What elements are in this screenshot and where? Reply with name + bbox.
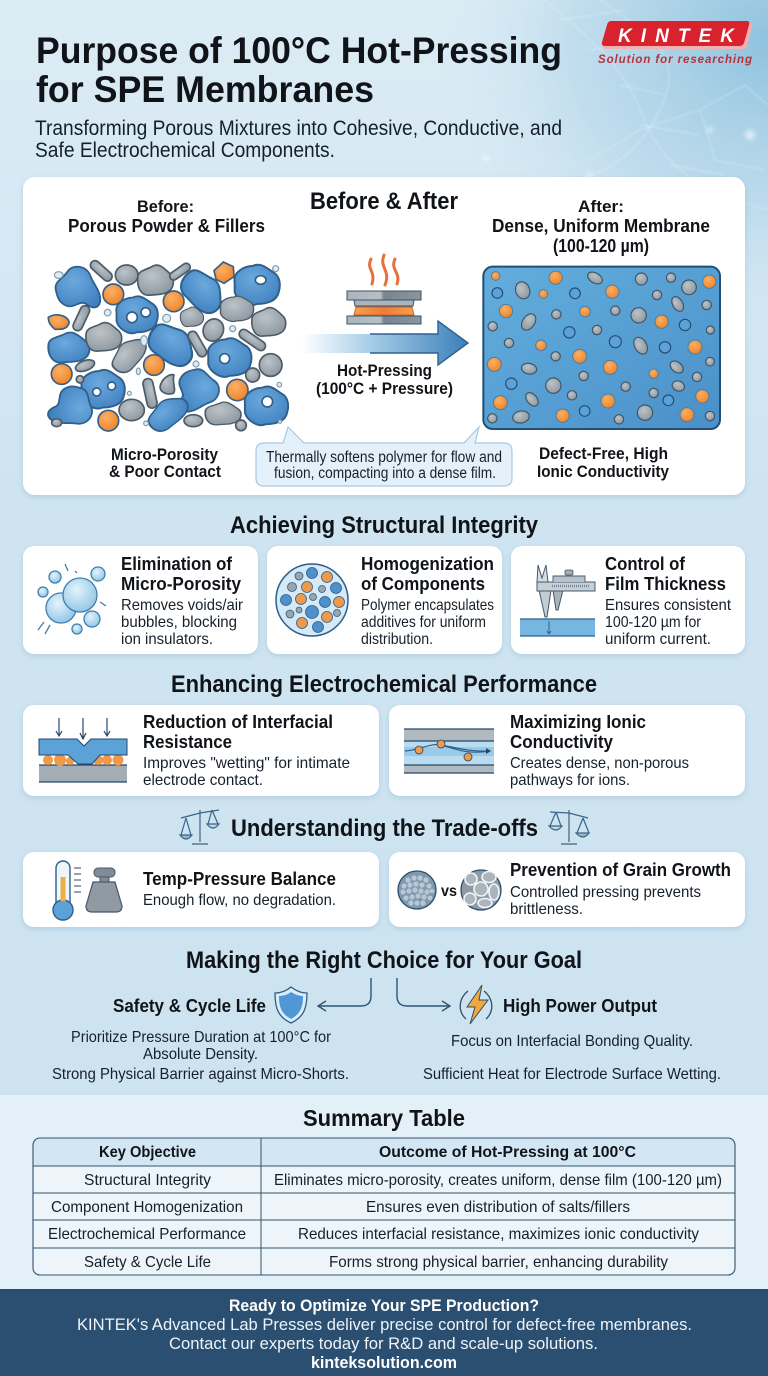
logo: KINTEK: [598, 21, 752, 66]
title: [36, 30, 562, 110]
after label: [492, 197, 710, 256]
table header: Key Objective: [99, 1144, 196, 1161]
row: safety and cycle life: Safety & Cycle Life: [84, 1254, 211, 1271]
text: maximizing ionic conductivity: Creates dense, non-porous: [510, 755, 689, 772]
arrow: hot-pressing direction: [302, 321, 468, 365]
icon: ion pathway: [404, 729, 494, 773]
label: defect-free: Ionic Conductivity: [537, 463, 670, 481]
label: safety and cycle life: Safety & Cycle Life: [113, 996, 266, 1016]
icon: balance scale right: [549, 810, 589, 844]
arrow label: (100°C + Pressure): [316, 380, 453, 398]
logo: KINTEK: KINTEK: [618, 26, 735, 47]
text: power guidance: Focus on Interfacial Bonding Quality.: [451, 1033, 693, 1050]
text: safety guidance: [52, 1029, 349, 1083]
footer call to action: kinteksolution.com: [311, 1354, 457, 1372]
text: control of film thickness: Ensures consistent: [605, 597, 732, 614]
text: prevention of grain growth: Prevention of Grain Growth: [510, 859, 731, 880]
heading: structural integrity: Achieving Structural Integrity: [230, 512, 539, 539]
after label: (100-120 µm): [553, 236, 649, 256]
arrow outline: [370, 321, 468, 365]
after label: Dense, Uniform Membrane: [492, 216, 710, 236]
arrow: to safety: [318, 978, 371, 1011]
text: homogenization of components: of Components: [361, 573, 485, 594]
label: defect-free: Defect-Free, High: [539, 445, 668, 463]
text: elimination of micro-porosity: [121, 553, 244, 648]
row: electrochemical performance: Reduces interfacial resistance, maximizes ionic conductivity: [298, 1226, 699, 1243]
text: temp-pressure balance: [143, 868, 336, 909]
text: elimination of micro-porosity: ion insulators.: [121, 631, 213, 648]
text: maximizing ionic conductivity: [510, 711, 689, 789]
row: component homogenization: [51, 1199, 630, 1216]
text: safety guidance: Absolute Density.: [143, 1046, 258, 1063]
text: maximizing ionic conductivity: pathways for ions.: [510, 772, 630, 789]
before label: Porous Powder & Fillers: [68, 216, 265, 236]
arrow label: [316, 362, 453, 398]
heading: electrochemical performance: Enhancing Electrochemical Performance: [171, 671, 597, 698]
text: maximizing ionic conductivity: Conductivity: [510, 731, 614, 752]
text: elimination of micro-porosity: Micro-Porosity: [121, 573, 242, 594]
text: temp-pressure balance: Enough flow, no degradation.: [143, 892, 336, 909]
icon: caliper and film: [520, 565, 595, 636]
label: vs: vs: [441, 883, 457, 900]
summary table: [33, 1138, 735, 1275]
panel: before and after: [23, 177, 745, 495]
callout: thermal softening: Thermally softens polymer for flow and: [266, 449, 502, 466]
card: prevention of grain growth: [389, 852, 745, 927]
text: homogenization of components: distribution.: [361, 631, 433, 648]
text: control of film thickness: 100-120 µm for: [605, 614, 702, 631]
icon: balance scale left: [180, 810, 219, 844]
text: control of film thickness: uniform current.: [605, 631, 711, 648]
after label: After:: [578, 197, 624, 216]
icon: shield: [275, 987, 307, 1023]
row: structural integrity: Eliminates micro-porosity, creates uniform, dense film (100-120 µm): [274, 1172, 722, 1189]
text: homogenization of components: Polymer encapsulates: [361, 597, 494, 614]
icon: thermometer: [53, 861, 81, 920]
row: safety and cycle life: [84, 1254, 668, 1271]
text: reduction of interfacial resistance: Improves "wetting" for intimate: [143, 755, 350, 772]
card: maximizing ionic conductivity: [389, 705, 745, 796]
text: power guidance: Sufficient Heat for Electrode Surface Wetting.: [423, 1066, 721, 1083]
text: homogenization of components: additives for uniform: [361, 614, 486, 631]
text: reduction of interfacial resistance: electrode contact.: [143, 772, 263, 789]
text: reduction of interfacial resistance: Resistance: [143, 731, 232, 752]
text: temp-pressure balance: Temp-Pressure Balance: [143, 868, 336, 889]
row: component homogenization: Component Homogenization: [51, 1199, 243, 1216]
label: high power output: High Power Output: [503, 996, 657, 1016]
arrow label: Hot-Pressing: [337, 362, 432, 380]
icon: coarse grains: [461, 870, 501, 910]
text: reduction of interfacial resistance: [143, 711, 350, 789]
label: micro-porosity: Micro-Porosity: [111, 446, 219, 464]
footer call to action: Ready to Optimize Your SPE Production?: [229, 1297, 539, 1315]
text: homogenization of components: Homogenization: [361, 553, 494, 574]
text: elimination of micro-porosity: bubbles, blocking: [121, 614, 237, 631]
row: electrochemical performance: Electrochemical Performance: [48, 1226, 246, 1243]
label: micro-porosity: [109, 446, 221, 481]
row: structural integrity: [84, 1172, 722, 1189]
illustration: heated press: [347, 255, 421, 324]
row: safety and cycle life: Forms strong physical barrier, enhancing durability: [329, 1254, 668, 1271]
subtitle: Transforming Porous Mixtures into Cohesive, Conductive, and: [35, 117, 562, 140]
row: electrochemical performance: [48, 1226, 699, 1243]
card: control of film thickness: [511, 546, 745, 654]
callout: thermal softening: [256, 427, 512, 486]
subtitle: [35, 117, 562, 162]
icon: fine grains: [398, 871, 436, 909]
icon: particle dispersion: [276, 564, 348, 636]
text: control of film thickness: Control of: [605, 553, 686, 574]
text: prevention of grain growth: Controlled pressing prevents: [510, 884, 701, 901]
text: homogenization of components: [361, 553, 494, 648]
footer call to action: KINTEK's Advanced Lab Presses deliver precise control for defect-free membranes.: [77, 1315, 692, 1334]
text: prevention of grain growth: [510, 859, 731, 918]
text: elimination of micro-porosity: Removes voids/air: [121, 597, 244, 614]
logo: KINTEK: Solution for researching: [598, 54, 752, 66]
text: control of film thickness: [605, 553, 732, 648]
icon: weight: [86, 868, 122, 912]
card: homogenization of components: [267, 546, 502, 654]
footer call to action: Contact our experts today for R&D and scale-up solutions.: [169, 1334, 598, 1353]
footer call to action: [0, 1289, 768, 1376]
label: micro-porosity: & Poor Contact: [109, 463, 221, 481]
icon: lightning bolt: [460, 985, 492, 1024]
text: maximizing ionic conductivity: Maximizing Ionic: [510, 711, 646, 732]
text: safety guidance: Prioritize Pressure Duration at 100°C for: [71, 1029, 332, 1046]
card: elimination of micro-porosity: [23, 546, 258, 654]
subtitle: Safe Electrochemical Components.: [35, 139, 335, 162]
text: elimination of micro-porosity: Elimination of: [121, 553, 233, 574]
heading: summary table: Summary Table: [303, 1105, 465, 1131]
callout: thermal softening: fusion, compacting into a dense film.: [274, 465, 496, 482]
card: temp-pressure balance: [23, 852, 379, 927]
table header: [99, 1144, 636, 1161]
row: structural integrity: Structural Integrity: [84, 1172, 211, 1189]
arrow: to power: [397, 978, 450, 1011]
before label: [68, 197, 265, 236]
goal: high power output: [397, 978, 721, 1083]
heading: trade-offs: Understanding the Trade-offs: [231, 815, 538, 842]
illustration: dense membrane: [483, 267, 720, 429]
text: power guidance: [423, 1033, 721, 1083]
heading: right choice: Making the Right Choice for Your Goal: [186, 947, 582, 974]
text: control of film thickness: Film Thickness: [605, 573, 726, 594]
heading: before and after: Before & After: [310, 188, 458, 215]
illustration: porous powder mixture: [46, 259, 288, 436]
icon: bubbles: [38, 564, 106, 634]
text: reduction of interfacial resistance: Reduction of Interfacial: [143, 711, 333, 732]
text: safety guidance: Strong Physical Barrier against Micro-Shorts.: [52, 1066, 349, 1083]
icon: pressing onto electrode: [39, 718, 127, 782]
goal: safety and cycle life: [52, 978, 371, 1083]
before label: Before:: [137, 197, 194, 216]
table header: Outcome of Hot-Pressing at 100°C: [379, 1144, 636, 1161]
title: for SPE Membranes: [36, 69, 374, 110]
text: prevention of grain growth: brittleness.: [510, 901, 583, 918]
icon: flames: [370, 255, 398, 285]
title: Purpose of 100°C Hot-Pressing: [36, 30, 562, 71]
row: component homogenization: Ensures even distribution of salts/fillers: [366, 1199, 630, 1216]
label: defect-free: [537, 445, 670, 481]
card: reduction of interfacial resistance: [23, 705, 379, 796]
